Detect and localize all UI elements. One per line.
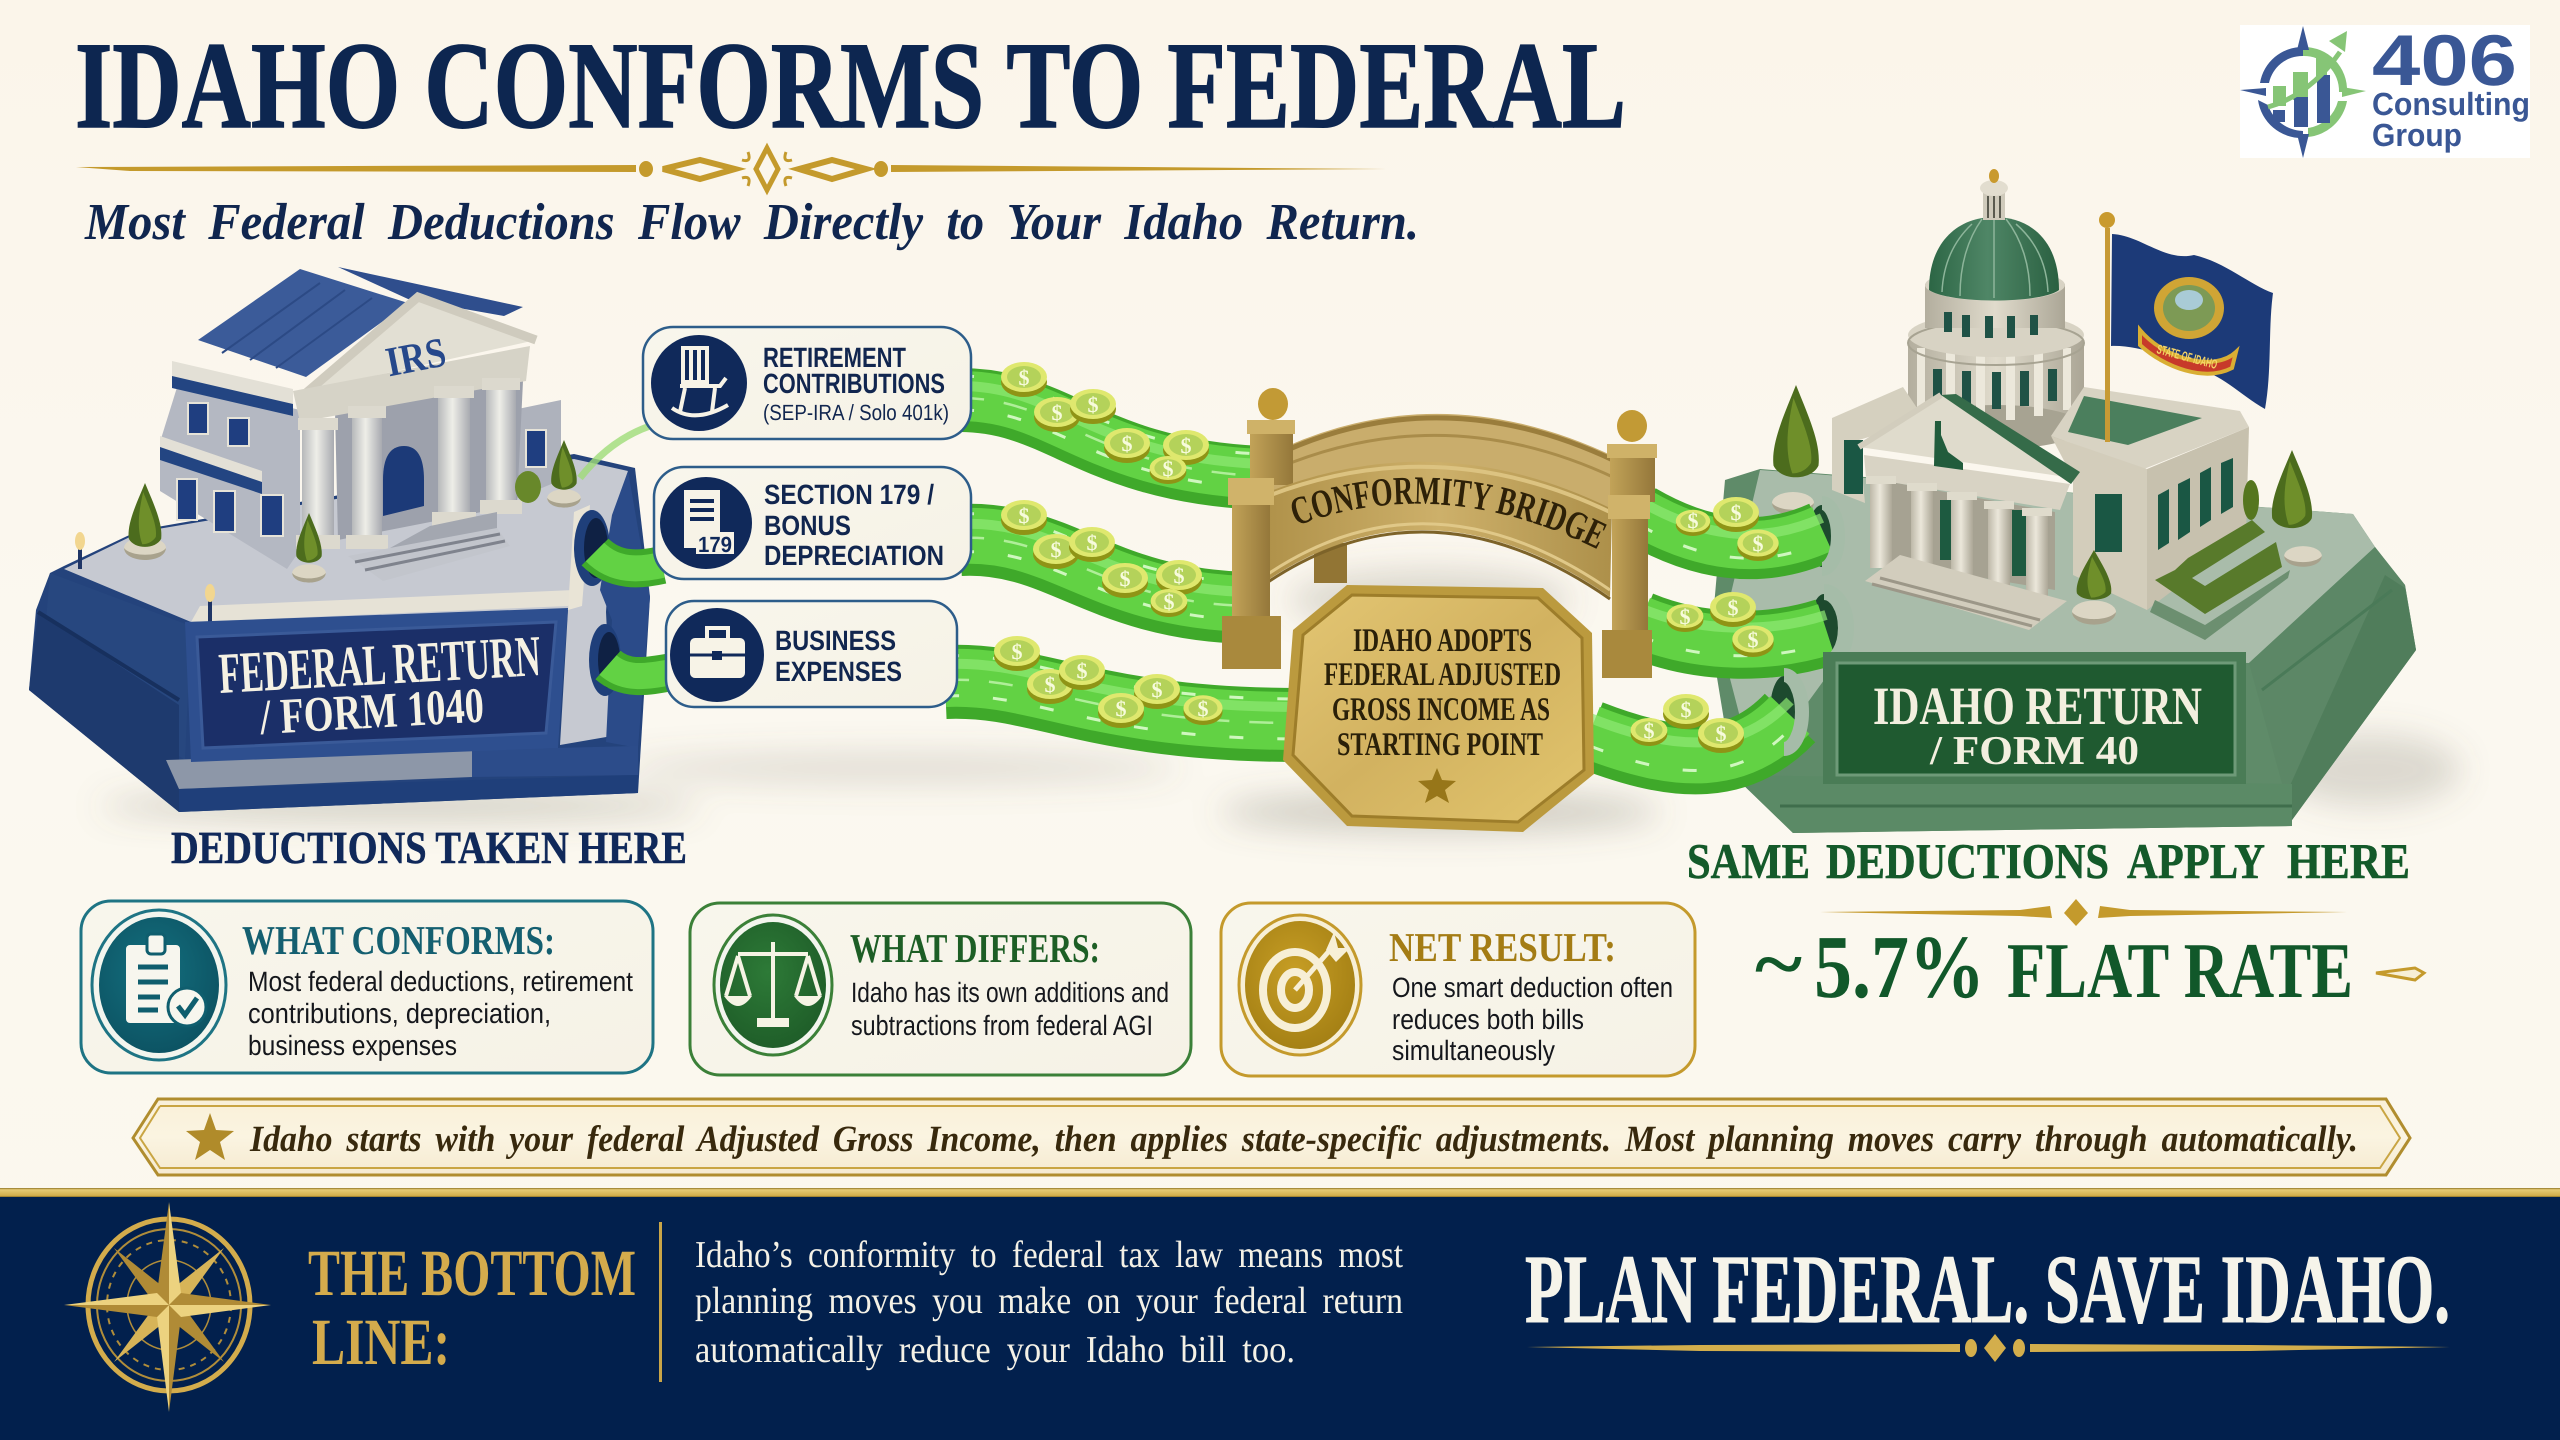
icon: star <box>1418 768 1456 803</box>
flat rate figure: FLAT RATE <box>2007 928 2353 1015</box>
federal return plaque: FEDERAL RETURN <box>217 623 542 706</box>
title: IDAHO CONFORMS TO FEDERAL <box>75 17 1626 154</box>
card: retirement contributions: RETIREMENT <box>763 342 906 373</box>
panel: what conforms: WHAT CONFORMS: <box>242 917 555 963</box>
logo: 406 Consulting Group: Group <box>2372 117 2462 153</box>
bottom band: LINE: <box>312 1306 450 1379</box>
trees and hedges <box>1772 385 2322 640</box>
coins on right flows: $ <box>1716 721 1726 746</box>
coins on left flows: $ <box>1052 400 1062 425</box>
closing ornament <box>1527 1334 2450 1362</box>
capitol dome <box>1908 169 2084 449</box>
state seal: STATE OF IDAHO <box>2155 341 2219 372</box>
panel: what differs: subtractions from federal AGI <box>851 1010 1153 1041</box>
coins on left flows: $ <box>1174 563 1184 588</box>
arch front face <box>1268 462 1612 597</box>
card: retirement contributions <box>643 327 971 439</box>
stream 1 <box>960 400 1260 478</box>
icon: rocking chair <box>651 335 747 431</box>
icon: scales <box>714 915 832 1055</box>
pipe outlets <box>574 510 621 696</box>
card: business expenses <box>666 601 957 707</box>
bridge deck <box>1268 414 1615 515</box>
panel: net result: NET RESULT: <box>1389 924 1616 970</box>
bottom band: automatically reduce your Idaho bill too. <box>695 1329 1295 1371</box>
panel: what conforms: business expenses <box>248 1030 457 1061</box>
coins on right flows: $ <box>1752 531 1764 556</box>
coins on left flows: $ <box>1050 537 1062 562</box>
stream 3 <box>945 682 1300 725</box>
coins on left flows: $ <box>1076 658 1088 683</box>
logo compass mark <box>2240 26 2366 158</box>
green deduction flows, left <box>580 376 1300 739</box>
coins on left flows: $ <box>1122 431 1132 456</box>
panel: net result: reduces both bills <box>1392 1004 1584 1035</box>
coins on right flows: $ <box>1688 508 1698 533</box>
card: retirement contributions: CONTRIBUTIONS <box>763 368 945 399</box>
flat rate figure: ~ <box>1755 920 1803 1007</box>
panel: what conforms: Most federal deductions, retirement <box>248 966 633 997</box>
pipe rims <box>1784 503 1846 749</box>
steps <box>348 528 510 581</box>
coins on left flows: $ <box>1012 639 1022 664</box>
card: section 179 bonus depreciation <box>654 467 971 579</box>
panel: what differs: WHAT DIFFERS: <box>850 925 1100 971</box>
same deductions apply here label <box>1687 833 2410 889</box>
pipe openings <box>1770 505 1838 748</box>
green deduction flows, right <box>1590 501 1826 770</box>
icon: target <box>1239 915 1361 1055</box>
card: section 179 bonus depreciation: BONUS <box>764 510 851 541</box>
bottom band: THE BOTTOM <box>308 1237 636 1310</box>
platform <box>1711 469 2416 833</box>
card: business expenses: BUSINESS <box>775 625 896 656</box>
door <box>383 446 424 516</box>
idaho return plaque: IDAHO RETURN <box>1873 676 2202 736</box>
icon: gold compass <box>64 1202 271 1412</box>
idaho return plaque <box>1823 652 2246 784</box>
same deductions apply here label: SAME <box>1687 833 1810 889</box>
logo: 406 Consulting Group: Consulting <box>2372 86 2530 122</box>
coins on right flows: $ <box>1680 697 1692 722</box>
card: section 179 bonus depreciation: SECTION 179 / <box>764 479 934 510</box>
title ornament <box>76 148 1386 190</box>
state seal <box>2140 277 2236 374</box>
rate ornament <box>1820 899 2347 926</box>
coins on left flows: $ <box>1088 392 1098 417</box>
coins on left flows: $ <box>1198 696 1208 721</box>
coins on left flows: $ <box>1044 672 1056 697</box>
coins on right flows <box>1631 497 1779 753</box>
coins on left flows: $ <box>1116 696 1126 721</box>
flat rate figure <box>1755 918 2353 1017</box>
icon: document 179: 179 <box>698 532 732 557</box>
coins on right flows: $ <box>1748 627 1758 652</box>
trees and lamps <box>75 440 581 622</box>
IRS label: IRS <box>382 330 450 386</box>
panel: what differs: Idaho has its own additions and <box>851 977 1169 1008</box>
panel: net result: simultaneously <box>1392 1035 1555 1066</box>
icon: document 179 <box>660 477 752 569</box>
coins on left flows <box>994 362 1223 728</box>
conformity bridge: CONFORMITY BRIDGE <box>1292 477 1607 549</box>
callout banner: Idaho starts with your federal Adjusted Gross Income, then applies state-specific adjustments. Most planning moves carry through automatically. <box>249 1119 2358 1160</box>
gold octagon plaque: IDAHO ADOPTS <box>1353 623 1532 659</box>
federal return plaque <box>185 608 568 762</box>
flat rate figure: 5.7% <box>1814 918 1985 1017</box>
coins on right flows: $ <box>1644 718 1654 743</box>
coins on left flows: $ <box>1164 589 1174 614</box>
icon: star <box>186 1113 234 1160</box>
soft ground shadows <box>100 570 2460 832</box>
idaho return building on platform <box>1590 169 2416 833</box>
coins on left flows: $ <box>1180 433 1192 458</box>
platform base <box>29 454 650 812</box>
building <box>160 267 561 581</box>
capitol main block <box>1832 387 2249 630</box>
icon: briefcase <box>670 608 764 702</box>
panel: what differs <box>690 903 1191 1075</box>
stream 2 <box>960 540 1250 608</box>
idaho silhouette <box>1934 421 1963 470</box>
coins on left flows: $ <box>1086 530 1098 555</box>
logo: 406 Consulting Group: 406 <box>2372 21 2517 101</box>
bottom band: Idaho’s conformity to federal tax law means most <box>695 1234 1403 1276</box>
same deductions apply here label: APPLY <box>2127 833 2265 889</box>
subtitle: Most Federal Deductions Flow Directly to Your Idaho Return. <box>84 194 1419 251</box>
bottom band <box>0 1188 2560 1440</box>
gold octagon plaque: FEDERAL ADJUSTED <box>1324 657 1561 693</box>
coins on right flows: $ <box>1680 604 1690 629</box>
panel: net result: One smart deduction often <box>1392 972 1673 1003</box>
panel: net result <box>1221 903 1695 1076</box>
same deductions apply here label: HERE <box>2287 833 2410 889</box>
panel: what conforms <box>81 901 653 1073</box>
card: section 179 bonus depreciation: DEPRECIATION <box>764 540 944 571</box>
panel: what conforms: contributions, depreciation, <box>248 998 551 1029</box>
logo: 406 Consulting Group <box>2240 21 2530 158</box>
federal return building on platform <box>29 267 650 812</box>
idaho return plaque: / FORM 40 <box>1929 727 2139 773</box>
same deductions apply here label: DEDUCTIONS <box>1826 833 2109 889</box>
bridge lettering <box>1296 504 1597 549</box>
coins on left flows: $ <box>1018 365 1030 390</box>
gold octagon plaque <box>1283 585 1594 832</box>
callout banner <box>133 1099 2410 1175</box>
coins on left flows: $ <box>1152 677 1162 702</box>
coins on left flows: $ <box>1120 566 1130 591</box>
gold octagon plaque: STARTING POINT <box>1337 727 1543 763</box>
flag <box>2099 212 2273 442</box>
gold octagon plaque: GROSS INCOME AS <box>1332 692 1550 728</box>
coins on left flows: $ <box>1018 503 1030 528</box>
conformity bridge <box>1222 388 1657 678</box>
bottom band: planning moves you make on your federal return <box>695 1280 1403 1322</box>
coins on right flows: $ <box>1730 500 1742 525</box>
card: business expenses: EXPENSES <box>775 656 902 687</box>
deductions taken here label: DEDUCTIONS TAKEN HERE <box>171 822 687 873</box>
card: retirement contributions: (SEP-IRA / Solo 401k) <box>763 400 949 425</box>
coins on left flows: $ <box>1162 456 1174 481</box>
federal return plaque: / FORM 1040 <box>258 677 485 745</box>
coins on right flows: $ <box>1728 595 1738 620</box>
back posts <box>1250 430 1293 485</box>
icon: clipboard <box>92 910 226 1060</box>
arrow ornament <box>2376 968 2424 980</box>
front posts <box>1232 480 1270 650</box>
